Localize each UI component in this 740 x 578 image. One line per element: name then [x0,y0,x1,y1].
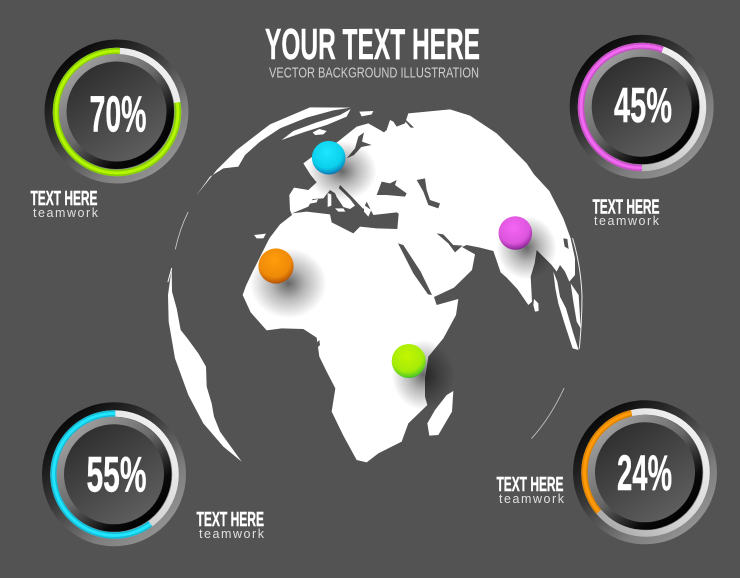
pin: green ball [392,344,426,378]
Mediterranean [292,185,399,233]
gauge: 70%: 70% [90,86,146,142]
label: 45% [592,196,660,228]
label: 55% [196,509,265,541]
label: 55%: TEXT HERE [196,509,264,531]
Mozambique detail [433,390,439,396]
label: 24% [496,474,565,506]
thin globe rim strokes [168,124,582,438]
Southeast Asia gap [563,238,569,249]
Persian Gulf [437,233,463,252]
ball shadows [250,141,557,410]
title [265,20,480,82]
label: 45%: TEXT HERE [592,196,660,218]
gauge: 55%: 55% [86,446,146,502]
label: 70% [30,188,99,220]
Gulf of Guinea inlet [310,340,320,352]
world globe map [168,107,582,462]
label: 70%: teamwork [33,206,99,220]
gauge: 45%: 45% [614,79,672,133]
land: Eurasia and Africa [243,109,575,462]
pin: cyan ball [312,141,346,174]
seas over land [292,119,569,396]
land: Americas edge [168,268,242,462]
Baltic [347,132,372,158]
Red Sea [398,243,432,295]
Black Sea [377,180,407,197]
land: Sri Lanka [533,299,539,312]
label: 24%: TEXT HERE [496,474,564,496]
land: Madagascar [427,391,453,436]
land: Iceland [313,129,327,135]
gauge: 45% [570,35,714,179]
label: 55%: teamwork [199,527,265,541]
land: Southeast Asia islands [553,272,579,350]
Italy and Mediterranean islands [309,188,371,217]
gauge: 24%: 24% [617,445,672,501]
label: 70%: TEXT HERE [30,188,98,210]
label: 45%: teamwork [594,214,660,228]
gauge: 55% [29,389,200,560]
pin: magenta ball [498,216,532,250]
label: 24%: teamwork [499,492,565,506]
pin: orange ball [258,248,294,284]
title: YOUR TEXT HERE [265,20,480,69]
land: Greenland [197,107,351,195]
gauge: 70% [44,40,188,184]
title: VECTOR BACKGROUND ILLUSTRATION [269,64,479,82]
gauge: 24% [560,387,731,558]
White Sea streak [403,119,414,128]
Caspian [417,178,440,208]
